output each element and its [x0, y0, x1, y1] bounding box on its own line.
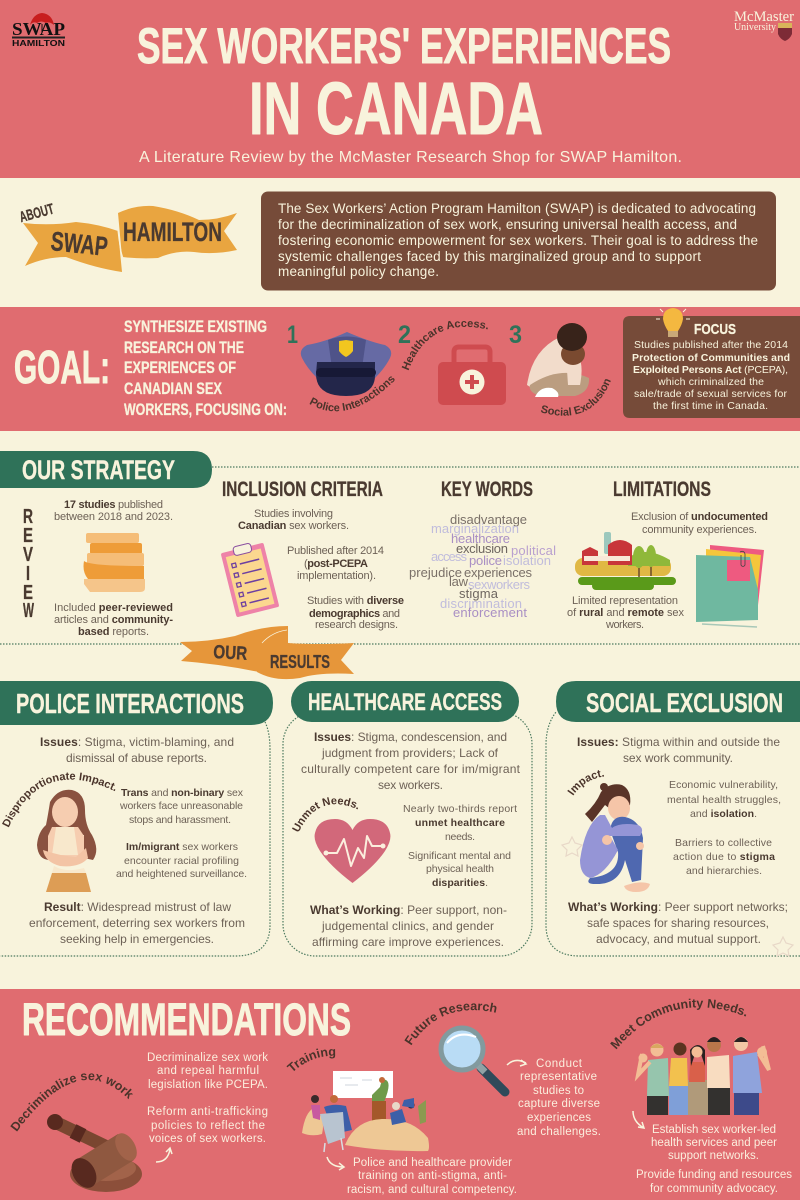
text: future research: capture diverse	[518, 1098, 600, 1110]
issues	[40, 735, 234, 765]
icon: heart with pulse	[315, 819, 390, 883]
text: unmet needs: physical health	[426, 863, 494, 875]
text: decriminalize: Decriminalize sex work	[147, 1052, 268, 1064]
text: unmet needs: Nearly two-thirds report	[403, 803, 517, 815]
text: decriminalize: policies to reflect the	[151, 1120, 265, 1132]
illustration: group of people	[638, 1037, 769, 1115]
text: training	[347, 1157, 517, 1196]
vertical word: review: E	[23, 525, 33, 547]
what's working: advocacy, and mutual support.	[596, 932, 761, 946]
text: disproportionate impact: encounter racial profiling	[124, 855, 239, 867]
word cloud: prejudice	[409, 565, 462, 580]
result: seeking help in emergencies.	[60, 932, 214, 946]
person 4	[707, 1037, 730, 1115]
heading	[556, 681, 800, 722]
banner: about SWAP Hamilton: HAMILTON	[123, 217, 222, 247]
panel: focus: sale/trade of sexual services for	[634, 388, 788, 400]
issues: judgment from providers; Lack of	[321, 746, 499, 760]
panel: focus: the first time in Canada.	[653, 400, 768, 412]
heading: our strategy: OUR STRATEGY	[22, 455, 175, 485]
vertical word: review	[23, 506, 34, 622]
label: police interactions: Police Interactions	[310, 376, 395, 412]
panel: police interactions	[0, 681, 273, 957]
limitation: rural: of rural and remote sex	[567, 607, 684, 619]
text: impact: and hierarchies.	[686, 865, 762, 877]
curved label: decriminalize sex work: Decriminalize sex work	[10, 1073, 133, 1132]
text: impact: action due to stigma	[673, 851, 775, 863]
text: future research: Conduct	[536, 1058, 583, 1070]
word cloud: discrimination	[440, 596, 522, 611]
limitation: rural: workers.	[605, 619, 644, 631]
text: impact	[667, 779, 781, 877]
decorative star	[562, 837, 582, 856]
heading: KEY WORDS	[441, 478, 533, 501]
logo: McMaster University: University	[734, 22, 776, 33]
person 5	[733, 1037, 769, 1115]
text: community needs: support networks.	[668, 1150, 759, 1162]
issues: Issues: Stigma within and outside the	[577, 735, 780, 749]
number 2: 2	[398, 321, 411, 349]
heading	[0, 681, 273, 725]
criterion: demographics: research designs.	[315, 619, 398, 631]
result: Result: Widespread mistrust of law	[44, 900, 231, 914]
banner: our results: OUR	[213, 642, 248, 665]
word cloud: law	[449, 574, 469, 589]
text: sources	[54, 602, 173, 638]
issues: Issues: Stigma, condescension, and	[314, 730, 507, 744]
panel: focus: which criminalized the	[657, 376, 764, 388]
icon: stack of books	[84, 533, 145, 592]
text: decriminalize: and repeal harmful	[157, 1065, 259, 1077]
result	[29, 900, 245, 946]
panel: focus: Studies published after the 2014	[634, 339, 788, 351]
text: studies count	[54, 499, 173, 523]
text: future research: experiences	[527, 1112, 591, 1124]
text: decriminalize: voices of sex workers.	[149, 1133, 266, 1145]
text: training: Police and healthcare provider	[353, 1157, 512, 1169]
heading: our strategy	[0, 451, 212, 488]
criterion: post-PCEPA: (post-PCEPA	[304, 558, 368, 570]
panel: about text: fostering economic empowerment for sex workers. Their goal is to address the	[278, 233, 758, 248]
text: training: training on anti-stigma, anti-	[358, 1170, 507, 1182]
text: future research: and challenges.	[517, 1126, 601, 1138]
text: sources: based reports.	[78, 626, 149, 638]
arrow	[156, 1148, 172, 1162]
banner: about SWAP Hamilton	[18, 201, 237, 272]
goal statement: EXPERIENCES OF	[124, 358, 236, 377]
word cloud: healthcare	[451, 531, 510, 546]
key words column	[409, 478, 556, 620]
word cloud: police	[469, 553, 502, 568]
goal statement: CANADIAN SEX	[124, 379, 222, 398]
text: decriminalize: legislation like PCEPA.	[148, 1079, 268, 1091]
text: unmet needs: unmet healthcare	[415, 817, 505, 829]
text: studies count: 17 studies published	[64, 499, 163, 511]
what's working	[310, 903, 507, 949]
text: community needs: for community advocacy.	[650, 1183, 778, 1195]
criterion: post-PCEPA: implementation).	[297, 570, 376, 582]
panel: healthcare access	[282, 681, 533, 957]
arrow	[507, 1060, 526, 1066]
limitation: rural: Limited representation	[572, 595, 678, 607]
what's working: What’s Working: Peer support, non-	[310, 903, 507, 917]
what's working: safe spaces for sharing resources,	[587, 916, 769, 930]
text: community needs: Provide funding and resources	[636, 1169, 792, 1181]
icon: first aid kit	[438, 347, 506, 405]
text: disproportionate impact: Im/migrant sex workers	[126, 841, 238, 853]
curved label: future research: Future Research	[404, 1002, 496, 1046]
goal statement: WORKERS, FOCUSING ON:	[124, 400, 287, 419]
text: unmet needs: needs.	[445, 831, 475, 843]
subtitle: A Literature Review by the McMaster Research Shop for SWAP Hamilton.	[139, 149, 682, 166]
heading: INCLUSION CRITERIA	[222, 478, 383, 501]
panel: about text	[261, 192, 776, 290]
criterion: Canadian: Studies involving	[254, 508, 333, 520]
word cloud: disadvantage	[450, 512, 527, 527]
word cloud: political	[511, 543, 556, 558]
issues: sex work community.	[623, 751, 733, 765]
what's working: What’s Working: Peer support networks;	[568, 900, 788, 914]
curved label: unmet needs: Unmet Needs.	[292, 797, 358, 832]
person 3	[688, 1045, 708, 1115]
panel: goal band	[0, 307, 800, 431]
panel: recommendations band	[0, 989, 800, 1200]
illustration: woman with crossed arms	[37, 790, 96, 892]
result: enforcement, deterring sex workers from	[29, 916, 245, 930]
goal heading: GOAL:	[14, 341, 110, 393]
inclusion criteria column	[220, 478, 404, 631]
text: sources: articles and community-	[54, 614, 173, 626]
text: disproportionate impact: workers face unreasonable	[119, 800, 243, 812]
panel: focus: Exploited Persons Act (PCEPA),	[633, 364, 788, 376]
banner: about SWAP Hamilton: ABOUT	[18, 201, 56, 226]
icon: police hat	[301, 332, 391, 396]
vertical word: review: I	[26, 563, 30, 585]
limitation: rural	[567, 595, 684, 631]
vertical word: review: E	[23, 582, 33, 604]
header band	[0, 0, 800, 178]
limitations column	[567, 478, 768, 631]
word cloud: enforcement	[453, 605, 527, 620]
text: unmet needs: disparities.	[432, 877, 488, 889]
what's working	[568, 900, 788, 946]
text: disproportionate impact: Trans and non-binary sex	[121, 787, 244, 799]
heading: RECOMMENDATIONS	[22, 994, 351, 1045]
title line 2: IN CANADA	[249, 67, 543, 150]
text: decriminalize: Reform anti-trafficking	[147, 1106, 268, 1118]
icon: sitting person	[527, 323, 589, 397]
number 1: 1	[287, 321, 298, 349]
vertical word: review: V	[23, 544, 33, 566]
panel: social exclusion	[545, 681, 800, 957]
heading	[291, 681, 519, 722]
text: future research: representative	[520, 1071, 597, 1083]
logo: SWAP Hamilton: SWAP	[12, 19, 65, 39]
banner: our results: RESULTS	[270, 652, 330, 672]
panel: about text: meaningful policy change.	[278, 264, 439, 279]
person 1	[638, 1044, 669, 1115]
person 2	[669, 1042, 688, 1115]
what's working: judgemental clinics, and gender	[321, 919, 494, 933]
decorative star	[773, 937, 793, 956]
text: disproportionate impact: stops and harassment.	[129, 814, 231, 826]
curved label: disproportionate impact: Disproportionate Impact.	[2, 772, 116, 828]
criterion: post-PCEPA: Published after 2014	[287, 545, 384, 557]
illustration: sad person hugging knees	[580, 783, 650, 892]
panel: focus: FOCUS	[694, 321, 736, 338]
text: impact: and isolation.	[690, 808, 757, 820]
criterion: demographics: Studies with diverse	[307, 595, 404, 607]
word cloud: stigma	[459, 586, 499, 601]
icon: folder	[696, 545, 764, 627]
text: impact: Barriers to collective	[675, 837, 772, 849]
logo: McMaster University	[734, 9, 794, 41]
word cloud: isolation	[503, 553, 551, 568]
text: community needs: health services and peer	[651, 1137, 777, 1149]
limitation: undocumented: community experiences.	[642, 524, 757, 536]
issues: dismissal of abuse reports.	[66, 751, 207, 765]
text: disproportionate impact: and heightened surveillance.	[116, 868, 247, 880]
word cloud: exclusion	[456, 541, 508, 556]
limitation: undocumented	[631, 511, 768, 536]
criterion: post-PCEPA	[287, 545, 384, 582]
arrow	[327, 1157, 344, 1170]
vertical word: review: W	[23, 600, 34, 622]
icon: farm landscape	[575, 532, 676, 590]
criterion: demographics: demographics and	[309, 608, 400, 620]
issues: sex workers.	[378, 778, 443, 792]
banner: about SWAP Hamilton: SWAP	[49, 226, 109, 262]
text: impact: mental health struggles,	[667, 794, 781, 806]
logo: McMaster University: McMaster	[734, 9, 794, 25]
panel: focus: Protection of Communities and	[632, 352, 790, 364]
panel: about text: for the decriminalization of sex work, ensuring universal health access, and	[278, 217, 737, 232]
number 3: 3	[509, 321, 522, 349]
icon: clipboard	[220, 540, 279, 617]
text: future research	[517, 1058, 601, 1138]
curved label: training: Training	[286, 1048, 336, 1071]
heading: HEALTHCARE ACCESS	[308, 689, 502, 716]
criterion: Canadian	[238, 508, 349, 532]
criterion: Canadian: Canadian sex workers.	[238, 520, 349, 532]
word cloud: sexworkers	[468, 577, 530, 592]
illustration: training session	[302, 1071, 429, 1152]
text: decriminalize	[147, 1052, 268, 1145]
what's working: affirming care improve experiences.	[312, 935, 504, 949]
panel: about text: systemic challenges faced by this marginalized group and to support	[278, 249, 701, 264]
criterion: demographics	[307, 595, 404, 631]
limitation: undocumented: Exclusion of undocumented	[631, 511, 768, 523]
text: community needs	[636, 1124, 792, 1195]
issues: Issues: Stigma, victim-blaming, and	[40, 735, 234, 749]
issues	[301, 730, 521, 792]
text: unmet needs: Significant mental and	[408, 850, 511, 862]
curved label: meet community needs: Meet Community Needs.	[610, 998, 746, 1050]
heading: LIMITATIONS	[613, 478, 711, 501]
text: disproportionate impact	[116, 787, 247, 880]
text: future research: studies to	[533, 1085, 584, 1097]
curved label: impact: Impact.	[567, 770, 604, 796]
heading: POLICE INTERACTIONS	[16, 688, 244, 719]
vertical word: review: R	[23, 506, 33, 528]
word cloud: access	[431, 549, 468, 564]
text: studies count: between 2018 and 2023.	[54, 511, 173, 523]
issues: culturally competent care for im/migrant	[301, 762, 521, 776]
dotted dividers	[0, 467, 800, 644]
panel: about text: The Sex Workers’ Action Program Hamilton (SWAP) is dedicated to advocating	[278, 201, 756, 216]
text: community needs: Establish sex worker-led	[652, 1124, 776, 1136]
issues	[577, 735, 780, 765]
word cloud	[409, 512, 556, 620]
word cloud: marginalization	[431, 521, 519, 536]
arrow	[633, 1111, 644, 1128]
word cloud: experiences	[464, 565, 532, 580]
icon: magnifying glass	[441, 1028, 505, 1092]
icon: gavel	[47, 1114, 142, 1192]
text: impact: Economic vulnerability,	[669, 779, 778, 791]
text: unmet needs	[403, 803, 517, 889]
logo: SWAP Hamilton	[12, 13, 65, 48]
text: training: racism, and cultural competency.	[347, 1184, 517, 1196]
review column	[23, 499, 173, 638]
label: social exclusion: Social Exclusion	[540, 379, 611, 416]
goal statement	[124, 317, 287, 419]
logo: SWAP Hamilton: HAMILTON	[12, 38, 65, 48]
goal statement: SYNTHESIZE EXISTING	[124, 317, 267, 336]
icon: lightbulb	[656, 303, 690, 337]
text: sources: Included peer-reviewed	[54, 602, 173, 614]
goal statement: RESEARCH ON THE	[124, 338, 244, 357]
panel: focus	[623, 303, 800, 418]
banner: our results	[180, 626, 354, 679]
label: healthcare access: Healthcare Access.	[402, 320, 488, 370]
